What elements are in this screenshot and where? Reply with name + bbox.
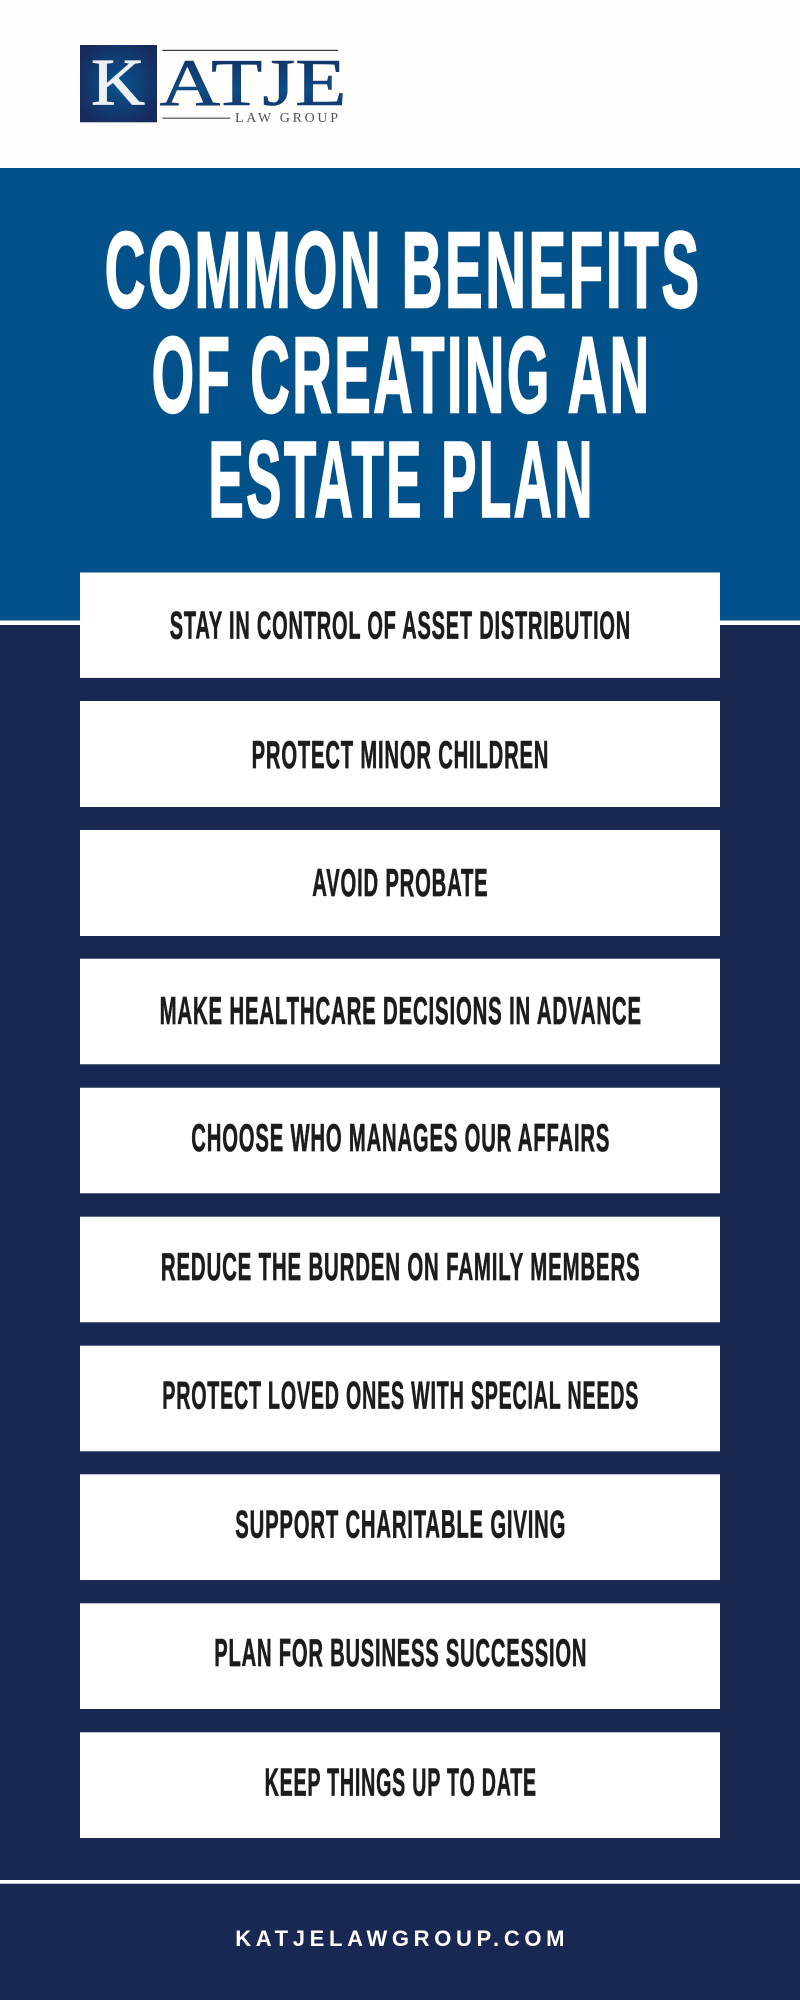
title: [105, 209, 702, 540]
title panel: [0, 168, 800, 620]
list card 1: [80, 572, 720, 678]
logo square with K: K: [91, 46, 145, 120]
footer panel: [0, 1880, 800, 2000]
header band: [0, 0, 800, 168]
list card 7: [80, 1346, 720, 1451]
logo wordmark: ATJE: [160, 46, 346, 120]
list card 10: KEEP THINGS UP TO DATE: [265, 1762, 537, 1804]
divider: [0, 620, 800, 625]
footer website: KATJELAWGROUP.COM: [235, 1926, 564, 1951]
logo square with K: [80, 45, 157, 122]
list card 4: [80, 959, 720, 1064]
logo subtitle: LAW GROUP: [235, 111, 338, 126]
list card 5: [80, 1088, 720, 1193]
logo: Katje Law Group: [80, 45, 346, 126]
list card 8: [80, 1474, 720, 1580]
list card 6: [80, 1217, 720, 1322]
list card 9: [80, 1603, 720, 1709]
navy list panel: [0, 625, 800, 1880]
list card 2: [80, 701, 720, 807]
list card 3: [80, 830, 720, 936]
list card 3: AVOID PROBATE: [312, 862, 488, 905]
list card 10: [80, 1732, 720, 1838]
